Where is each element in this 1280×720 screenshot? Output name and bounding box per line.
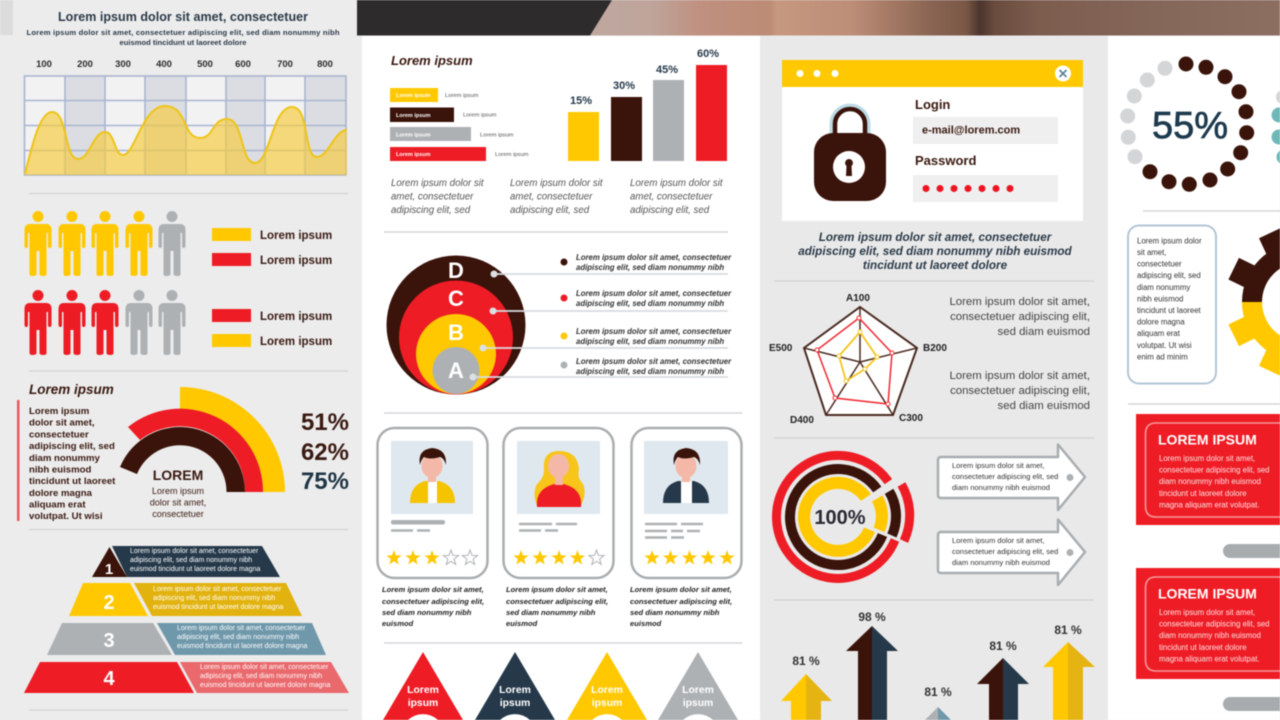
text block: lorem ipsum — [17, 382, 116, 522]
rounded text box: adipiscing elit, sed — [1137, 271, 1201, 280]
arrow callout 2: Lorem ipsum dolor sit amet, — [952, 536, 1045, 545]
horizontal bars: Lorem ipsum — [396, 132, 431, 138]
text block: lorem ipsum: dolore magna — [29, 488, 93, 499]
text block: lorem ipsum: diam nonummy — [29, 453, 101, 464]
rounded text box: consectetuer — [1137, 260, 1182, 269]
title: Lorem ipsum dolor sit amet, consectetuer — [58, 10, 308, 24]
arrow callout 1: consectetuer adipiscing elit, sed — [952, 472, 1058, 481]
profile card 2 — [504, 428, 614, 578]
text block: lorem ipsum: nibh euismod — [29, 464, 91, 476]
nested circle legend: Lorem ipsum dolor sit amet, consectetuer — [576, 357, 732, 366]
rising arrows chart: 81 % — [792, 654, 820, 668]
rounded text box: Lorem ipsum dolor — [1137, 236, 1202, 246]
rounded text box — [1128, 226, 1216, 384]
italic captions: adipiscing elit, sed — [391, 205, 471, 216]
vertical bar chart: 30% — [613, 80, 635, 92]
area chart: 700 — [277, 59, 293, 70]
pyramid: adipiscing elit, sed diam nonummy nibh — [177, 634, 299, 641]
radial bar chart: dolor sit amet, — [150, 498, 206, 508]
arrow callout 2: diam nonummy nibh euismod — [952, 558, 1050, 567]
radar text — [949, 296, 1090, 412]
text block: lorem ipsum: volutpat. Ut wisi — [29, 511, 103, 522]
icon: padlock — [814, 107, 886, 201]
italic captions: amet, consectetuer — [391, 192, 474, 202]
profile card captions: sed diam nonummy nibh — [630, 608, 720, 617]
rounded text box: aliquam erat — [1137, 329, 1181, 338]
profile card captions: consectetuer adipiscing elit, — [506, 597, 608, 606]
pyramid: adipiscing elit, sed diam nonummy nibh — [200, 673, 322, 680]
area chart: 800 — [317, 59, 333, 70]
rounded text box: tincidunt ut laoreet — [1137, 306, 1202, 315]
red card 2 — [1136, 568, 1280, 679]
triangle markers: Lorem — [407, 685, 439, 696]
rounded text box: nibh euismod — [1137, 294, 1183, 303]
area chart: 500 — [197, 59, 213, 70]
grey pill 1 — [1223, 544, 1280, 558]
header photo band — [357, 0, 1280, 36]
pyramid: Lorem ipsum dolor sit amet, consectetuer — [130, 548, 259, 555]
rising arrows chart: 81 % — [924, 685, 952, 699]
profile card 1 — [378, 428, 488, 578]
radial bar chart: Lorem ipsum — [152, 486, 204, 496]
subtitle: Lorem ipsum dolor sit amet, consectetuer adipiscing elit, sed diam nonummy nibh — [26, 28, 340, 37]
nested circles: B — [448, 320, 464, 345]
nested circles: D — [448, 258, 464, 283]
profile card captions: consectetuer adipiscing elit, — [382, 597, 484, 606]
radar chart: E500 — [769, 343, 793, 354]
red card 1: tincidunt ut laoreet dolore — [1159, 489, 1247, 498]
horizontal bars: Lorem ipsum — [463, 112, 497, 118]
pyramid — [24, 546, 349, 693]
radar text: sed diam euismod — [998, 326, 1090, 338]
legend row 1: Lorem ipsum — [260, 230, 332, 242]
pyramid: 3 — [103, 630, 115, 652]
profile card captions: Lorem ipsum dolor sit amet, — [630, 585, 732, 594]
profile card captions: euismod — [630, 619, 662, 628]
pictogram row 1 — [24, 211, 186, 276]
login caption: tincidunt ut laoreet dolore — [863, 259, 1008, 272]
pyramid: euismod tincidunt ut laoreet dolore magna — [200, 682, 330, 689]
radial bar chart: LOREM — [153, 467, 203, 483]
text block: lorem ipsum: Lorem ipsum — [29, 382, 114, 397]
triangle markers: Lorem — [499, 685, 531, 696]
text block: lorem ipsum: dolor sit amet, — [29, 418, 95, 429]
pyramid: euismod tincidunt ut laoreet dolore magna — [130, 566, 260, 573]
login window: e-mail@lorem.com — [922, 124, 1020, 136]
login caption: Lorem ipsum dolor sit amet, consectetuer — [819, 231, 1053, 244]
italic captions: amet, consectetuer — [630, 192, 713, 202]
italic captions: Lorem ipsum dolor sit — [510, 178, 604, 189]
radar text: consectetuer adipiscing elit, — [950, 385, 1090, 397]
panel: third column — [769, 60, 1095, 720]
triangle markers: Lorem — [682, 685, 714, 696]
red card 2: tincidunt ut laoreet dolore — [1159, 643, 1247, 652]
legend row 1 — [212, 228, 332, 267]
heading: Lorem ipsum — [391, 53, 473, 68]
nested circle legend: adipiscing elit, sed diam nonummy nibh — [576, 263, 724, 272]
red card 2: diam nonummy nibh euismod — [1159, 631, 1261, 640]
profile card 3 — [632, 428, 742, 578]
triangle markers: ipsum — [683, 698, 713, 709]
nested circles: C — [448, 286, 464, 311]
login caption: adipiscing elit, sed diam nonummy nibh euismod — [798, 245, 1073, 258]
vertical bar chart — [568, 48, 727, 161]
text block: lorem ipsum: adipiscing elit, sed — [29, 441, 115, 452]
rounded text box: enim ad minim — [1137, 352, 1188, 361]
radar text: Lorem ipsum dolor sit amet, — [949, 296, 1090, 308]
profile card captions: sed diam nonummy nibh — [382, 608, 472, 617]
arrow callout 2 — [938, 520, 1085, 585]
rounded text box: diam nonummy — [1137, 283, 1190, 292]
red card 2: Lorem ipsum dolor sit amet, — [1159, 608, 1255, 617]
italic captions: Lorem ipsum dolor sit — [630, 178, 724, 189]
login caption — [798, 231, 1073, 272]
exploded ring chart: 100% — [814, 507, 866, 529]
nested circle legend: Lorem ipsum dolor sit amet, consectetuer — [576, 253, 732, 262]
percentages: 62% — [301, 439, 349, 466]
pyramid: euismod tincidunt ut laoreet dolore magna — [177, 643, 307, 650]
radial bar chart — [120, 387, 285, 519]
triangle markers: ipsum — [408, 698, 438, 709]
nested circle legend: adipiscing elit, sed diam nonummy nibh — [576, 299, 724, 308]
text block: lorem ipsum: tincidunt ut laoreet — [29, 476, 116, 487]
area chart: 300 — [115, 59, 131, 70]
subtitle — [26, 28, 340, 47]
pyramid: adipiscing elit, sed diam nonummy nibh — [130, 557, 252, 564]
horizontal bars: Lorem ipsum — [396, 93, 431, 99]
area chart — [24, 59, 347, 175]
login window: Login — [915, 97, 950, 112]
profile card captions — [382, 585, 732, 628]
profile card captions: sed diam nonummy nibh — [506, 608, 596, 617]
triangle markers — [383, 652, 738, 720]
triangle markers: ipsum — [592, 698, 622, 709]
pyramid: Lorem ipsum dolor sit amet, consectetuer — [200, 664, 329, 671]
italic captions: adipiscing elit, sed — [630, 205, 710, 216]
italic captions: adipiscing elit, sed — [510, 205, 590, 216]
red card 2: magna aliquam erat volutpat. — [1159, 654, 1260, 664]
horizontal bars — [390, 88, 529, 161]
legend row 2 — [212, 309, 332, 348]
arrow callout 1: diam nonummy nibh euismod — [952, 483, 1050, 492]
nested circles: A — [448, 358, 464, 383]
panel: middle column — [378, 48, 742, 720]
vertical bar chart: 60% — [697, 48, 719, 60]
area chart: 200 — [77, 59, 93, 70]
text block: lorem ipsum: aliquam erat — [29, 500, 86, 510]
pyramid: 1 — [105, 561, 113, 578]
radar chart — [769, 293, 947, 426]
login window: Password — [915, 153, 976, 168]
exploded ring chart — [776, 455, 910, 578]
red card 1 — [1136, 414, 1280, 525]
profile card captions: euismod — [382, 619, 414, 628]
panel: right column — [1120, 56, 1280, 711]
profile card captions: Lorem ipsum dolor sit amet, — [506, 585, 608, 594]
rising arrows chart — [781, 610, 1095, 720]
pyramid: euismod tincidunt ut laoreet dolore magna — [153, 604, 283, 611]
percentages: 51% — [301, 409, 349, 436]
horizontal bars: Lorem ipsum — [495, 152, 529, 158]
nested circle legend — [560, 253, 732, 376]
percentages — [301, 409, 349, 495]
subtitle: euismod tincidunt ut laoreet dolore — [120, 38, 246, 47]
horizontal bars: Lorem ipsum — [445, 93, 479, 99]
red card 1: LOREM IPSUM — [1158, 432, 1257, 448]
nested circle legend: Lorem ipsum dolor sit amet, consectetuer — [576, 289, 732, 298]
italic captions: Lorem ipsum dolor sit — [391, 178, 485, 189]
pyramid: adipiscing elit, sed diam nonummy nibh — [153, 595, 275, 602]
nested circle legend: adipiscing elit, sed diam nonummy nibh — [576, 367, 724, 376]
red card 1: consectetuer adipiscing elit, sed — [1159, 466, 1270, 474]
rising arrows chart: 81 % — [989, 639, 1017, 653]
vertical bar chart: 45% — [656, 64, 678, 76]
horizontal bars: Lorem ipsum — [396, 152, 431, 158]
profile card captions: euismod — [506, 619, 538, 628]
red card 1: Lorem ipsum dolor sit amet, — [1159, 454, 1255, 463]
triangle markers: Lorem — [591, 685, 623, 696]
italic captions: amet, consectetuer — [510, 192, 593, 202]
radar text: Lorem ipsum dolor sit amet, — [949, 370, 1090, 382]
rounded text box: volutpat. Ut wisi — [1137, 341, 1192, 350]
red card 2: consectetuer adipiscing elit, sed — [1159, 620, 1270, 628]
text block: lorem ipsum: consectetuer — [29, 429, 89, 440]
arrow callout 1 — [938, 444, 1085, 510]
percentages: 75% — [301, 468, 349, 495]
nested circle legend: adipiscing elit, sed diam nonummy nibh — [576, 337, 724, 346]
radar chart: C300 — [899, 413, 923, 424]
radar text: consectetuer adipiscing elit, — [950, 311, 1090, 323]
triangle markers: ipsum — [500, 698, 530, 709]
nested circles — [386, 256, 728, 394]
text block: lorem ipsum: Lorem ipsum — [29, 406, 89, 417]
radar text: sed diam euismod — [998, 400, 1090, 412]
legend row 1: Lorem ipsum — [260, 255, 332, 267]
radial bar chart: consectetuer — [152, 509, 204, 519]
arrow callout 1: Lorem ipsum dolor sit amet, — [952, 461, 1045, 470]
arrow callout 2: consectetuer adipiscing elit, sed — [952, 547, 1058, 556]
area chart: 100 — [36, 59, 52, 70]
pyramid: 2 — [103, 592, 115, 614]
pyramid: 4 — [103, 668, 115, 690]
legend row 2: Lorem ipsum — [260, 336, 332, 348]
horizontal bars: Lorem ipsum — [396, 113, 431, 119]
rounded text box: sit amet, — [1137, 248, 1166, 257]
horizontal bars: Lorem ipsum — [480, 132, 514, 138]
red card 1: magna aliquam erat volutpat. — [1159, 500, 1260, 510]
radar chart: B200 — [923, 343, 947, 354]
area chart: 400 — [156, 59, 172, 70]
profile card captions: Lorem ipsum dolor sit amet, — [382, 585, 484, 594]
grey pill 2 — [1223, 697, 1280, 711]
cropped teal dots — [1272, 90, 1280, 164]
panel: left column — [17, 10, 349, 710]
rising arrows chart: 81 % — [1054, 623, 1082, 637]
login window — [782, 60, 1083, 221]
profile card captions: consectetuer adipiscing elit, — [630, 597, 732, 606]
gear — [1228, 228, 1280, 376]
italic captions — [391, 178, 724, 216]
nested circle legend: Lorem ipsum dolor sit amet, consectetuer — [576, 327, 732, 336]
red card 2: LOREM IPSUM — [1158, 586, 1257, 602]
radar chart: A100 — [846, 293, 870, 304]
pyramid: Lorem ipsum dolor sit amet, consectetuer — [177, 625, 306, 632]
rising arrows chart: 98 % — [858, 610, 886, 624]
red card 1: diam nonummy nibh euismod — [1159, 477, 1261, 486]
vertical bar chart: 15% — [570, 95, 592, 107]
legend row 2: Lorem ipsum — [260, 311, 332, 323]
radar chart: D400 — [790, 415, 814, 426]
area chart: 600 — [235, 59, 251, 70]
pictogram row 2 — [24, 290, 186, 355]
rounded text box: dolore magna — [1137, 318, 1185, 327]
dotted progress ring — [1120, 56, 1254, 192]
pyramid: Lorem ipsum dolor sit amet, consectetuer — [153, 586, 282, 593]
dotted progress ring: 55% — [1152, 105, 1228, 147]
